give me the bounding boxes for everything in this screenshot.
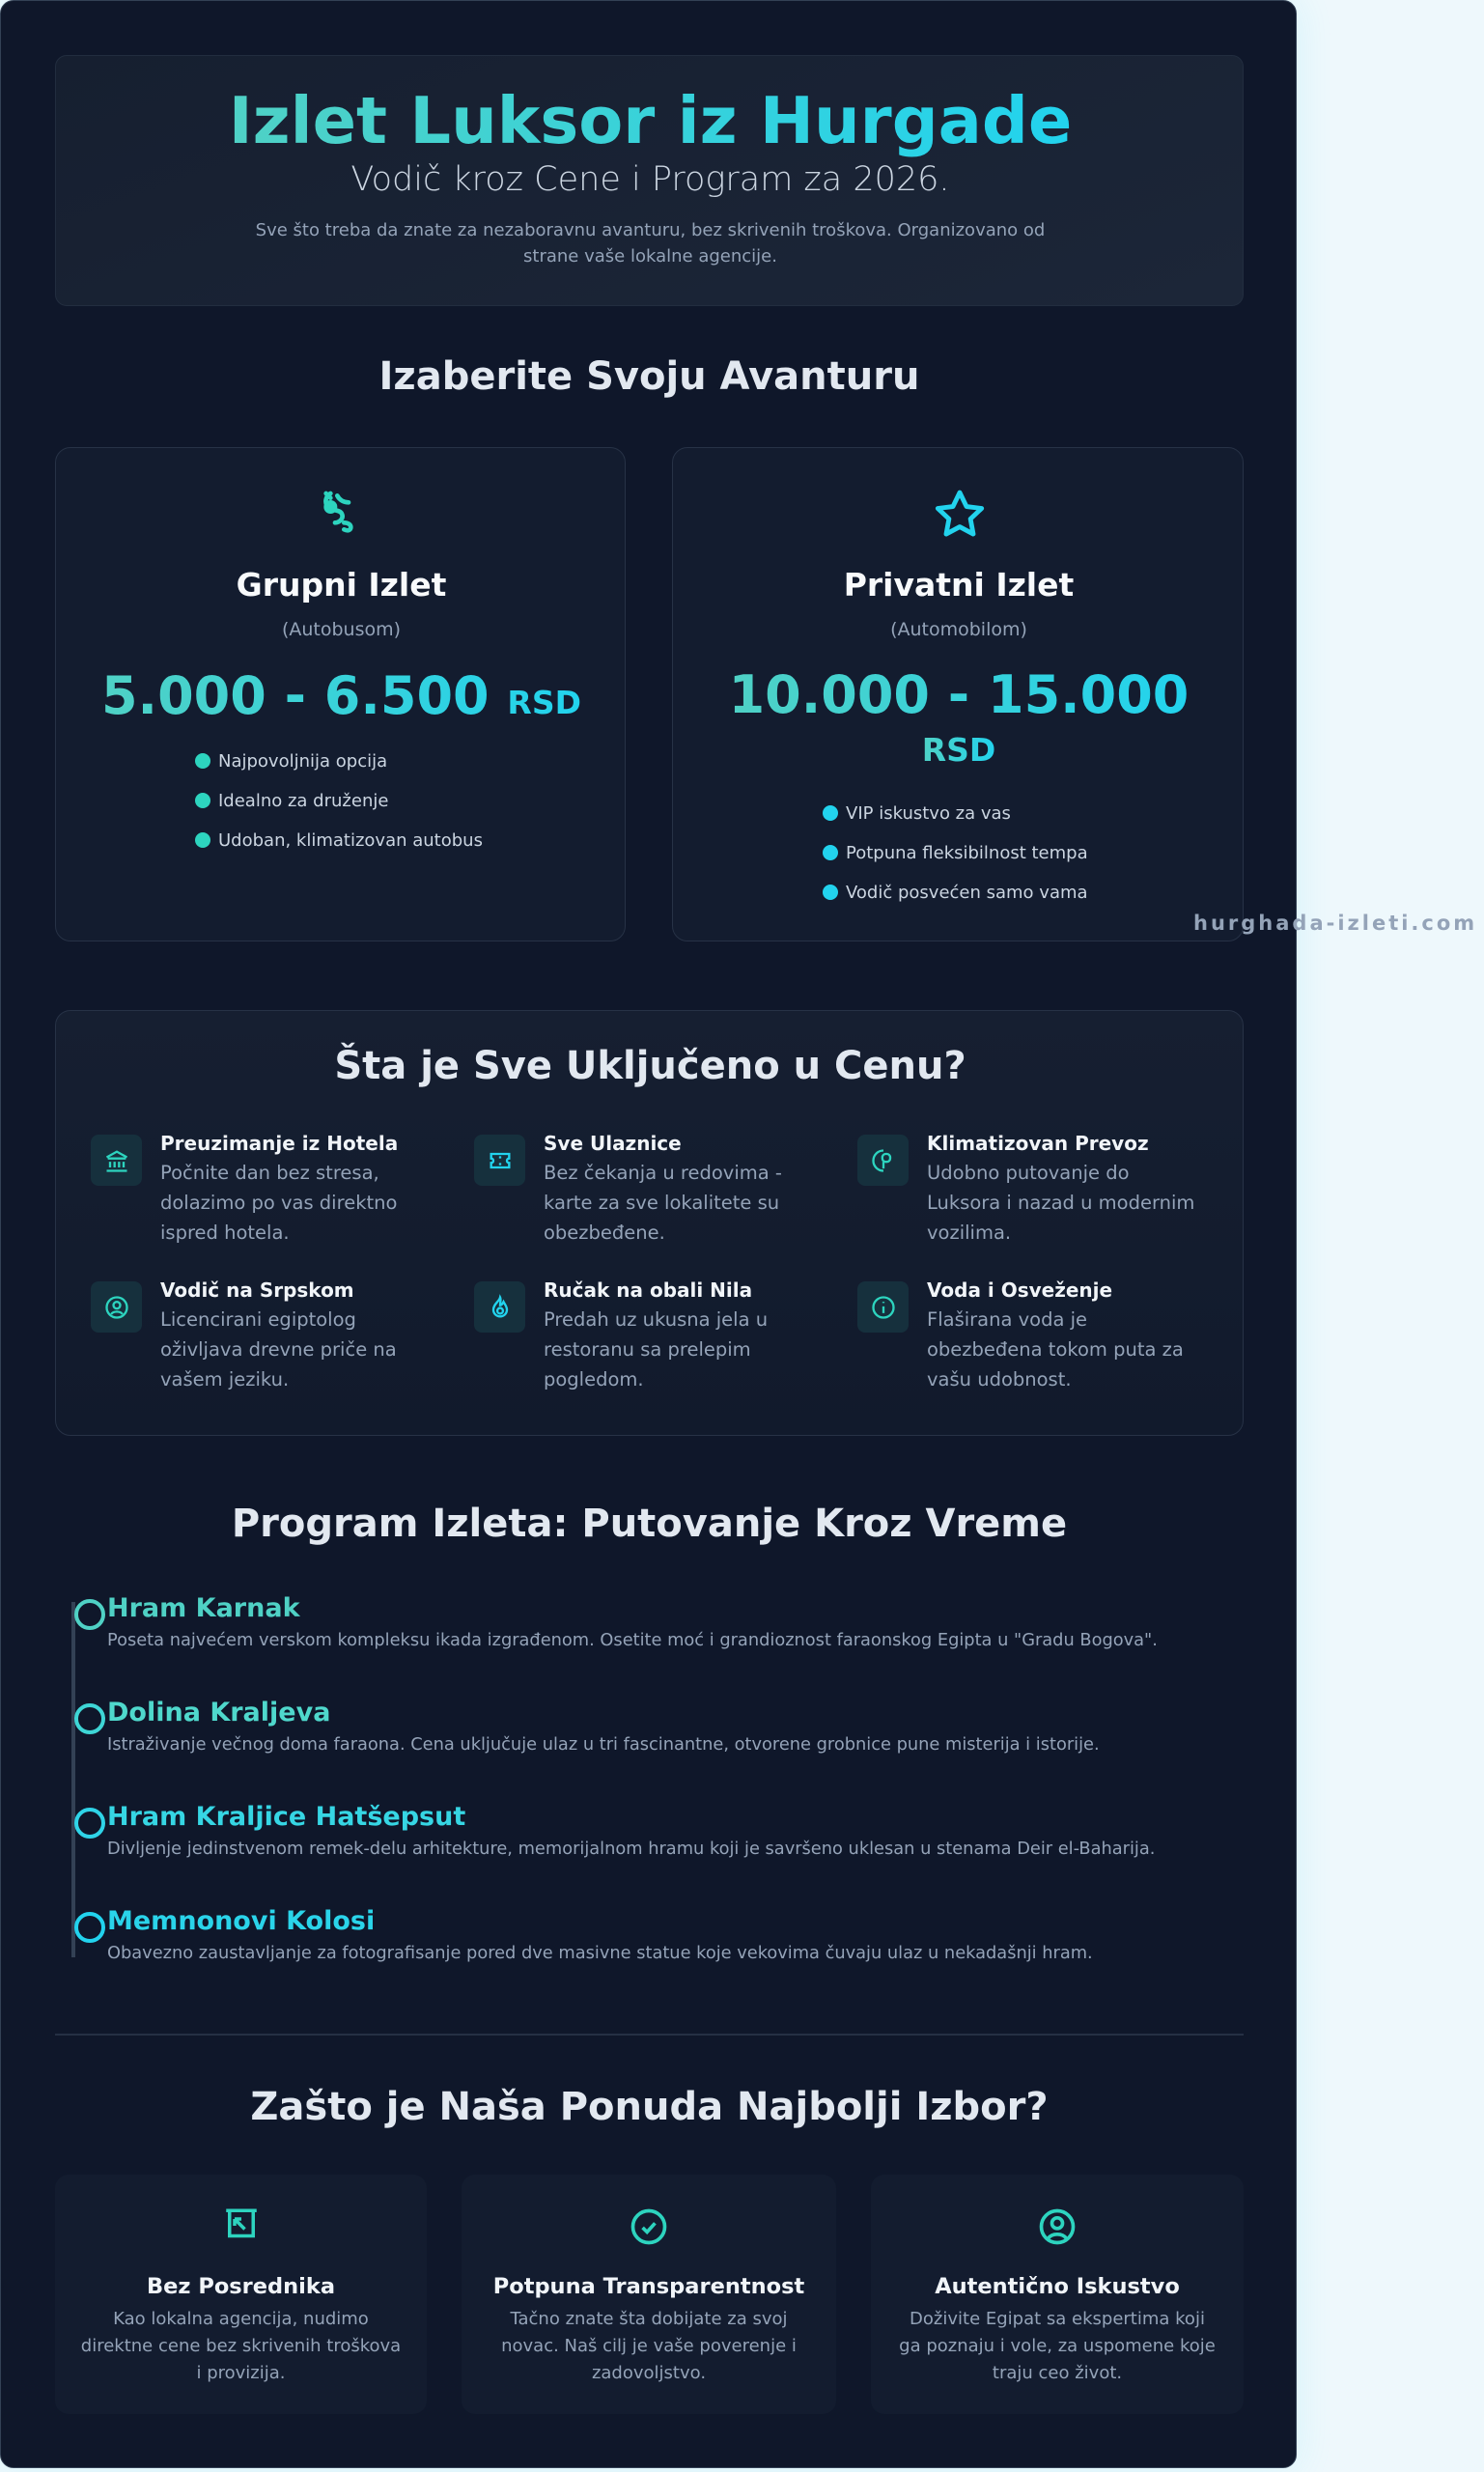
item: lunch: Predah uz ukusna jela u restoranu sa prelepim pogledom. xyxy=(544,1308,768,1390)
item: guide: Licencirani egiptolog oživljava drevne priče na vašem jeziku. xyxy=(160,1308,397,1390)
watermark: hurghada-izleti.com xyxy=(1193,912,1477,935)
timeline: Memnonovi Kolosi xyxy=(107,1906,375,1936)
heading: program: Program Izleta: Putovanje Kroz Vreme xyxy=(232,1502,1067,1546)
card: authentic: Doživite Egipat sa ekspertima koji xyxy=(910,2309,1205,2329)
bullet list: Potpuna fleksibilnost tempa xyxy=(846,843,1088,863)
price: 5.000 - 6.500 RSD xyxy=(101,665,581,726)
item: tickets: Sve Ulaznice xyxy=(544,1132,682,1155)
item: hotel pickup: Preuzimanje iz Hotela xyxy=(160,1132,398,1155)
subtitle: Vodič kroz Cene i Program za 2026. xyxy=(350,160,950,199)
item: water xyxy=(857,1278,1184,1390)
item: lunch xyxy=(474,1278,768,1390)
timeline: Hram Karnak xyxy=(107,1593,300,1623)
timeline: Poseta najvećem verskom kompleksu ikada izgrađenom. Osetite moć i grandioznost faraonskog Egipta u "Gradu Bogova". xyxy=(107,1630,1158,1650)
bullet list: Udoban, klimatizovan autobus xyxy=(218,830,483,851)
item: tickets xyxy=(474,1132,782,1244)
price: RSD xyxy=(922,731,995,769)
item: lunch: Ručak na obali Nila xyxy=(544,1278,752,1302)
stop: Karnak xyxy=(74,1593,1158,1650)
item: water: Voda i Osveženje xyxy=(927,1278,1112,1302)
card: transparency: Tačno znate šta dobijate za svoj novac. Naš cilj je vaše poverenje i zadovoljstvo. xyxy=(501,2309,797,2383)
bullet list xyxy=(195,751,483,851)
stop: Colossi xyxy=(74,1906,1093,1963)
card: transparency xyxy=(462,2175,836,2414)
timeline: Obavezno zaustavljanje za fotografisanje pored dve masivne statue koje vekovima čuvaju ulaz u nekadašnji hram. xyxy=(107,1943,1093,1963)
card: group tour xyxy=(55,447,626,941)
title: Izlet Luksor iz Hurgade xyxy=(229,83,1072,158)
bullet list: VIP iskustvo za vas xyxy=(846,803,1011,824)
card: authentic: ga poznaju i vole, za uspomene koje xyxy=(899,2336,1216,2356)
item: tickets: Bez čekanja u redovima - karte za sve lokalitete su obezbeđene. xyxy=(544,1162,782,1244)
timeline: Hram Kraljice Hatšepsut xyxy=(107,1802,465,1832)
header panel xyxy=(55,55,1244,306)
heading: choose adventure: Izaberite Svoju Avanturu xyxy=(379,354,919,399)
timeline xyxy=(71,1593,1158,1963)
heading: included: Šta je Sve Uključeno u Cenu? xyxy=(334,1044,966,1088)
card: no middlemen: Bez Posrednika xyxy=(147,2274,335,2299)
panel: included xyxy=(55,1010,1244,1436)
card: authentic xyxy=(871,2175,1244,2414)
icon: group xyxy=(323,491,353,533)
timeline: Istraživanje večnog doma faraona. Cena uključuje ulaz u tri fascinantne, otvorene grobnice pune misterija i istorije. xyxy=(107,1734,1100,1755)
bullet list: Vodič posvećen samo vama xyxy=(846,883,1088,903)
price xyxy=(729,664,1189,769)
card title: Grupni Izlet xyxy=(237,566,446,604)
intro text: Sve što treba da znate za nezaboravnu avanturu, bez skrivenih troškova. Organizovano od strane vaše lokalne agencije. xyxy=(256,220,1045,267)
card title: Privatni Izlet xyxy=(844,566,1074,604)
timeline: Dolina Kraljeva xyxy=(107,1698,330,1728)
bullet list: Idealno za druženje xyxy=(218,791,388,811)
card: no middlemen xyxy=(55,2175,427,2414)
card: private tour xyxy=(672,447,1244,941)
stop: Hatshepsut xyxy=(74,1802,1155,1859)
stop: Valley of Kings xyxy=(74,1698,1100,1755)
item: guide: Vodič na Srpskom xyxy=(160,1278,354,1302)
item: transport: Udobno putovanje do Luksora i nazad u modernim vozilima. xyxy=(927,1162,1194,1244)
price: 10.000 - 15.000 xyxy=(729,664,1189,725)
item: water: Flaširana voda je obezbeđena tokom puta za vašu udobnost. xyxy=(927,1308,1184,1390)
card: no middlemen: Kao lokalna agencija, nudimo direktne cene bez skrivenih troškova i provizija. xyxy=(81,2309,401,2383)
icon: star xyxy=(935,491,985,537)
bullet list xyxy=(823,803,1088,903)
card: authentic: Autentično Iskustvo xyxy=(935,2274,1180,2299)
card: transparency: Potpuna Transparentnost xyxy=(493,2274,804,2299)
item: guide xyxy=(91,1278,397,1390)
card subtitle: (Automobilom) xyxy=(890,619,1027,640)
card subtitle: (Autobusom) xyxy=(282,619,401,640)
card: authentic: traju ceo život. xyxy=(993,2363,1122,2383)
item: transport: Klimatizovan Prevoz xyxy=(927,1132,1149,1155)
heading: why us: Zašto je Naša Ponuda Najbolji Izbor? xyxy=(250,2085,1049,2129)
item: hotel pickup: Počnite dan bez stresa, dolazimo po vas direktno ispred hotela. xyxy=(160,1162,397,1244)
item: hotel pickup xyxy=(91,1132,398,1244)
item: transport xyxy=(857,1132,1194,1244)
timeline: Divljenje jedinstvenom remek-delu arhitekture, memorijalnom hramu koji je savršeno uklesan u stenama Deir el-Baharija. xyxy=(107,1839,1155,1859)
bullet list: Najpovoljnija opcija xyxy=(218,751,387,772)
